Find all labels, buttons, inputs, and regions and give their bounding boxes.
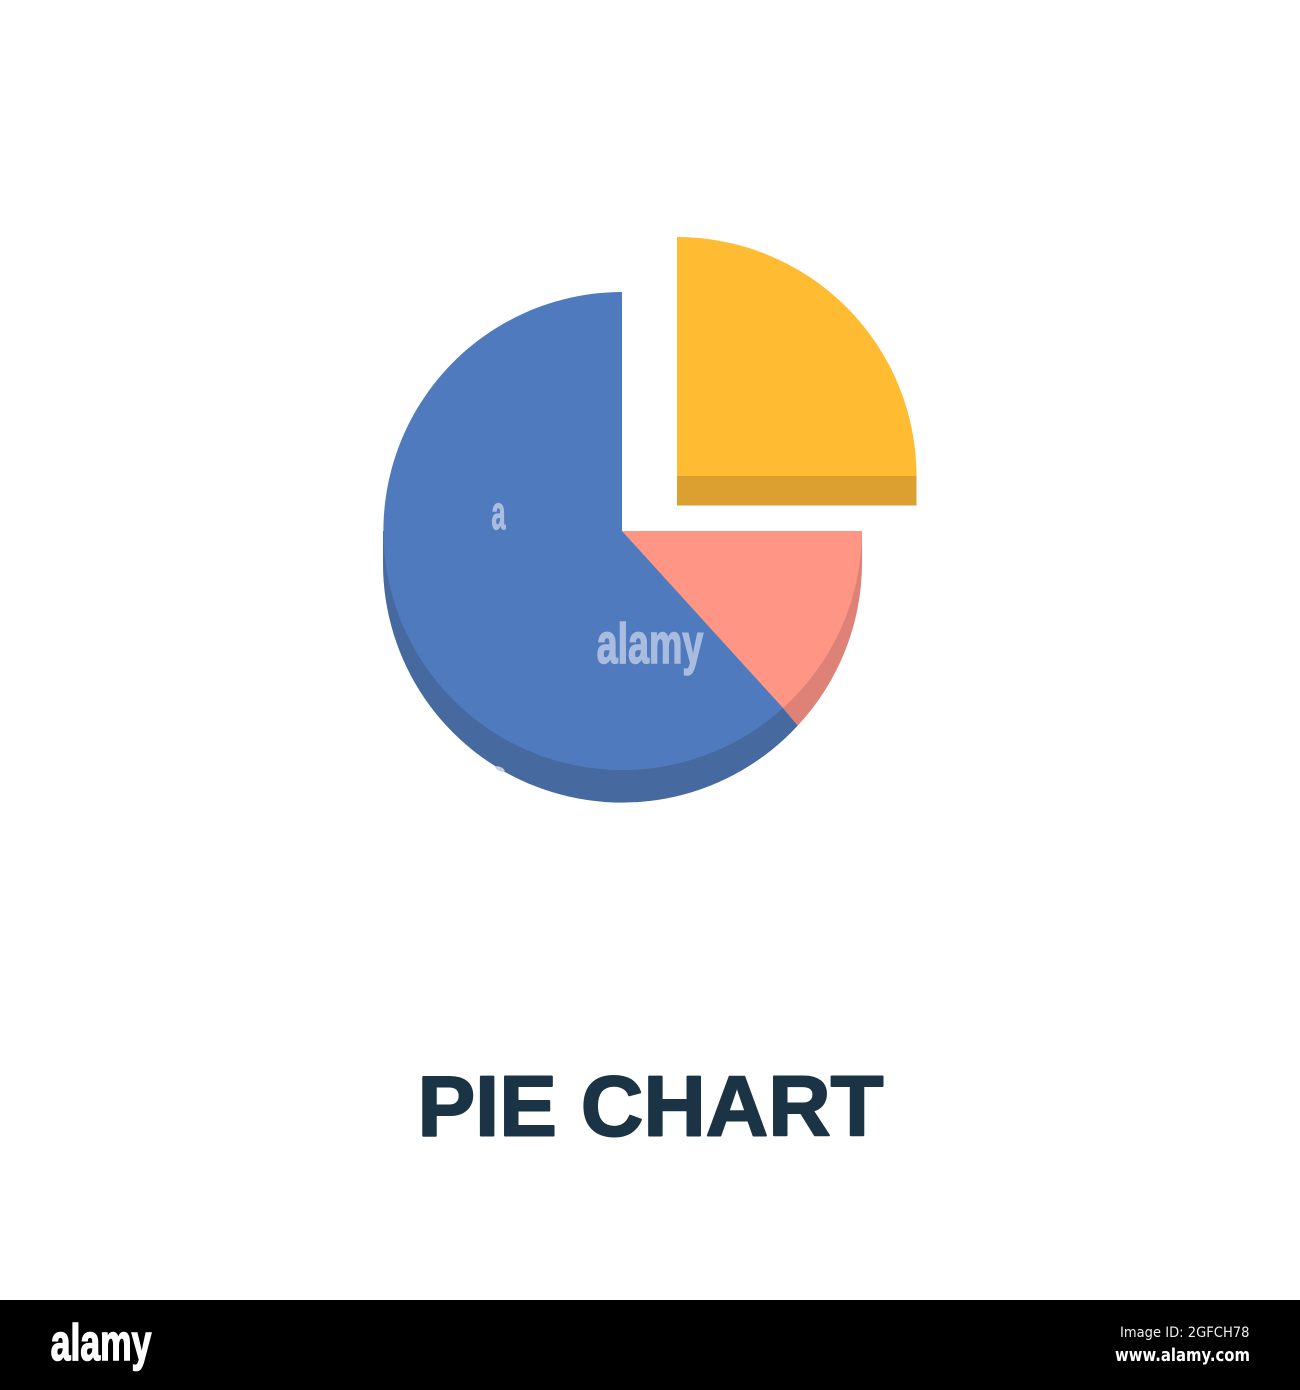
blue slice side depth <box>383 531 798 803</box>
yellow slice side depth <box>677 470 916 506</box>
icon: pie chart <box>383 237 916 803</box>
salmon slice top face <box>622 531 862 708</box>
yellow slice top face <box>677 237 916 476</box>
blue slice top face <box>383 292 783 770</box>
watermark speck on pie edge <box>495 765 505 773</box>
footer bar <box>0 1300 1300 1390</box>
footer logo: alamy <box>51 1314 152 1371</box>
title: PIE CHART <box>418 1060 884 1154</box>
watermark: small letter: a <box>492 486 506 539</box>
website: www.alamy.com <box>1115 1345 1250 1366</box>
salmon slice side depth <box>622 531 862 726</box>
image id: Image ID: 2GFCH78 <box>1120 1325 1250 1341</box>
watermark: alamy: alamy <box>597 612 703 676</box>
